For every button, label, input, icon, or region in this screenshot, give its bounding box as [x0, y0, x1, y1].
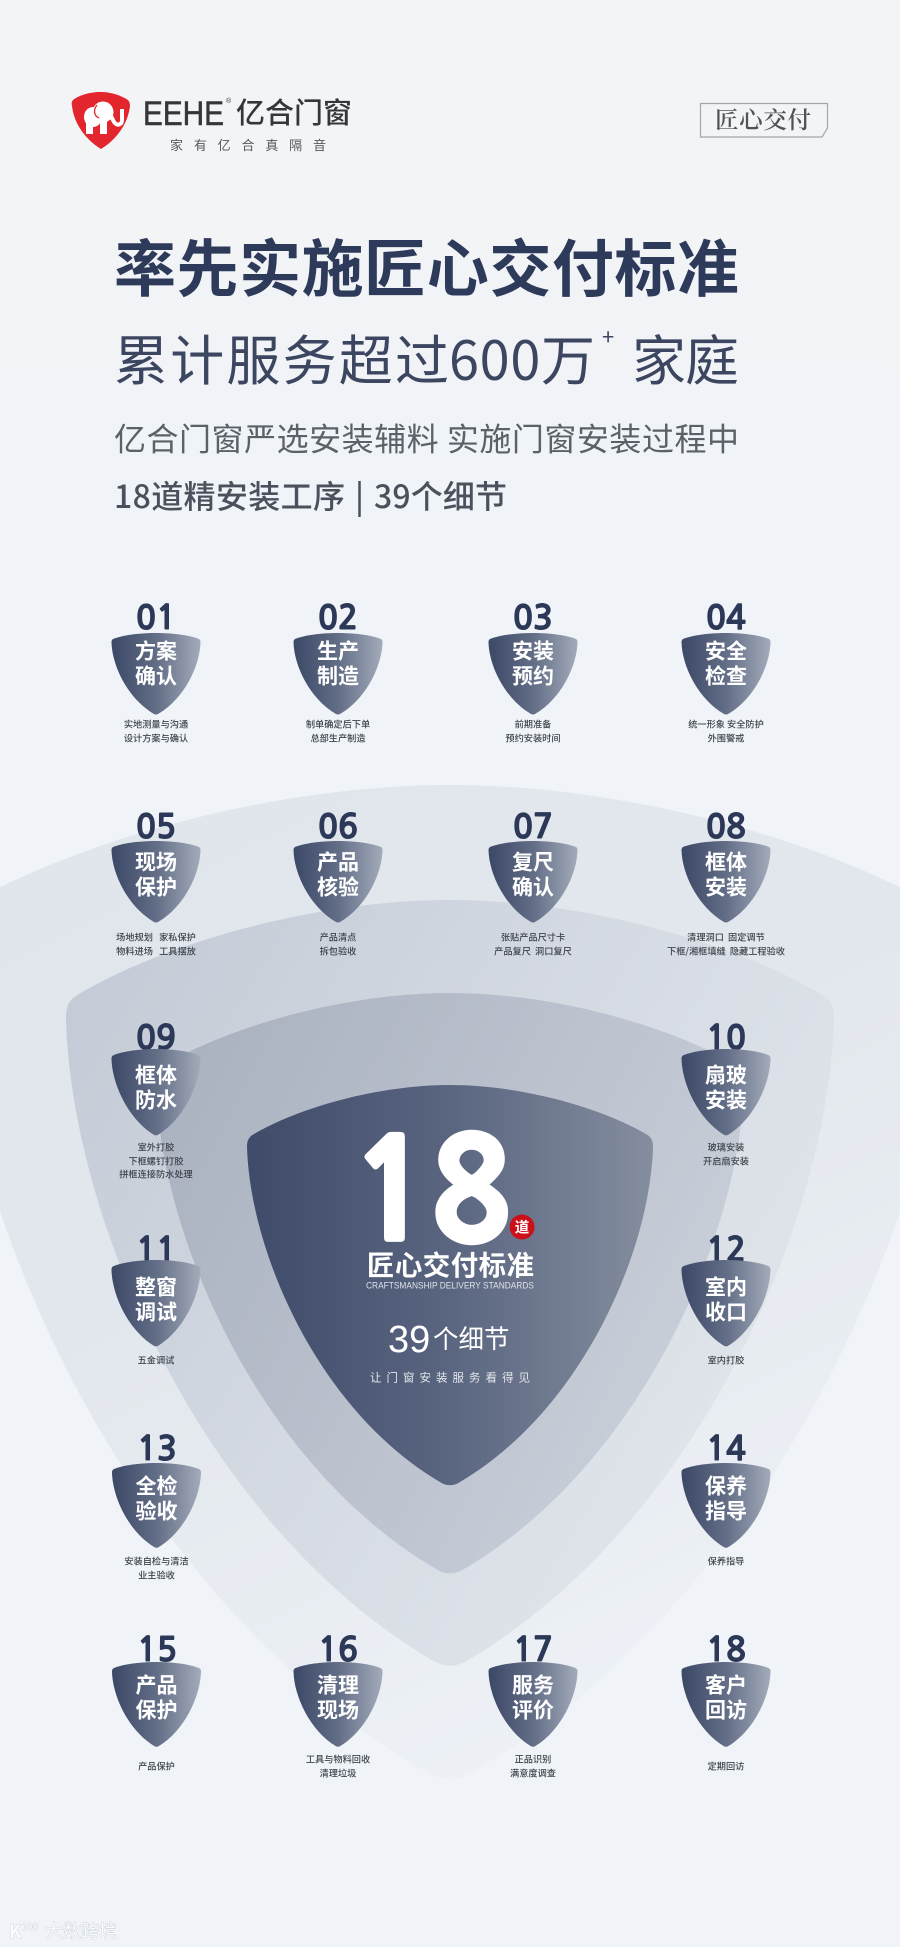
step 03: 预约安装时间	[505, 730, 561, 744]
step 06	[294, 810, 382, 958]
step 14: 保养	[705, 1470, 747, 1500]
step 11: 五金调试	[138, 1352, 174, 1366]
step 07	[488, 810, 578, 958]
step 14: 指导	[705, 1496, 747, 1526]
step 03	[488, 601, 578, 744]
step 07: 张贴产品尺寸卡	[501, 930, 565, 944]
subtitle	[114, 317, 739, 396]
step 06: 产品清点	[320, 930, 356, 944]
step 18	[682, 1633, 770, 1772]
step 02: 生产	[317, 636, 359, 666]
step 04: 统一形象 安全防护	[688, 716, 764, 730]
step 11: 整窗	[135, 1272, 177, 1302]
watermark	[9, 1918, 117, 1944]
step 04: 检查	[705, 660, 747, 690]
stats line	[114, 472, 507, 518]
subtitle: 累计服务超过	[114, 317, 449, 396]
step 04	[682, 601, 770, 744]
step 01: 方案	[135, 636, 177, 666]
step 07: 确认	[512, 872, 554, 902]
step 16: 工具与物料回收	[306, 1752, 370, 1766]
step 18: 回访	[705, 1694, 747, 1724]
step 08: 安装	[705, 872, 747, 902]
badge: 匠心交付: 匠心交付	[715, 101, 811, 135]
step 13: 全检	[136, 1470, 178, 1500]
step 02: 制造	[317, 660, 359, 690]
step 13: 安装自检与清洁	[124, 1554, 189, 1568]
step 02	[294, 601, 382, 744]
step 12	[682, 1233, 770, 1366]
step 05: 物料进场 工具摆放	[116, 944, 196, 958]
central shield: 18 standards	[247, 1085, 653, 1485]
step 10: 玻璃安装	[708, 1140, 744, 1154]
english subtitle: CRAFTSMANSHIP DELIVERY STANDARDS	[366, 1280, 534, 1292]
step 17: 17	[513, 1633, 553, 1666]
brand name: EEHE	[143, 95, 224, 133]
step 07: 产品复尺 洞口复尺	[494, 944, 572, 958]
step 18: 客户	[705, 1670, 747, 1700]
step 05: 现场	[135, 846, 177, 876]
stats line: |	[355, 472, 364, 518]
step 05: 05	[136, 810, 176, 843]
step 13: 13	[137, 1432, 177, 1465]
step 01	[112, 601, 200, 744]
step 13	[112, 1432, 201, 1582]
subtitle: +	[602, 320, 614, 352]
step 09: 09	[136, 1021, 176, 1054]
step 04: 安全	[705, 636, 747, 666]
step 16: 现场	[317, 1694, 359, 1724]
watermark: 100	[22, 1919, 38, 1933]
icon: red shield with elephant	[72, 92, 130, 149]
logo: EEHE 亿合门窗	[72, 90, 352, 154]
step 08	[667, 810, 785, 958]
step 06: 核验	[317, 872, 359, 902]
step 05	[112, 810, 200, 958]
concentric shield backdrop	[0, 785, 900, 1779]
step 08: 框体	[705, 846, 747, 876]
step 09	[112, 1021, 200, 1180]
step 15: 产品	[136, 1670, 178, 1700]
step 06: 产品	[317, 846, 359, 876]
tagline: 家有亿合真隔音	[170, 135, 326, 154]
step 03: 前期准备	[515, 716, 551, 730]
step 03: 安装	[512, 636, 554, 666]
step 17: 服务	[512, 1670, 554, 1700]
step 16: 清理垃圾	[320, 1766, 356, 1780]
subtitle: 家庭	[632, 317, 739, 396]
step 11: 调试	[135, 1296, 177, 1326]
39 details	[388, 1319, 510, 1361]
step 03: 预约	[512, 660, 554, 690]
watermark: K	[9, 1918, 22, 1944]
step 14: 保养指导	[708, 1554, 744, 1568]
badge: 道	[510, 1214, 534, 1240]
step 02: 02	[318, 601, 358, 634]
step 18: 18	[706, 1633, 746, 1666]
39 details: 个细节	[433, 1319, 510, 1356]
step 12: 12	[706, 1233, 746, 1266]
step 12: 室内打胶	[708, 1352, 744, 1366]
step 11	[112, 1233, 200, 1366]
logo: EEHE 亿合门窗: ®	[226, 97, 232, 105]
step 01: 确认	[135, 660, 177, 690]
step 18: 定期回访	[708, 1758, 744, 1772]
step 17	[488, 1633, 578, 1780]
title: 率先实施匠心交付标准	[114, 219, 739, 309]
step 05: 场地规划 家私保护	[116, 930, 196, 944]
step 16: 清理	[317, 1670, 359, 1700]
big number 18: 18	[352, 1122, 511, 1260]
step 10	[682, 1021, 770, 1168]
step 17: 正品识别	[515, 1752, 551, 1766]
step 04: 04	[706, 601, 746, 634]
step 08: 清理洞口 固定调节	[687, 930, 765, 944]
step 13: 验收	[136, 1496, 178, 1526]
step 09: 拼框连接防水处理	[119, 1166, 193, 1180]
step 08: 下框/湘框填缝 隐藏工程验收	[667, 944, 785, 958]
stats line: 18道精安装工序	[114, 472, 345, 518]
39 details: 39	[388, 1319, 430, 1361]
step 14: 14	[706, 1432, 746, 1465]
step 05: 保护	[135, 872, 177, 902]
step 10: 扇玻	[705, 1060, 747, 1090]
step 09: 下框螺钉打胶	[128, 1154, 184, 1168]
badge: 道: 道	[515, 1216, 530, 1238]
step 07: 复尺	[512, 846, 554, 876]
slogan: 让门窗安装服务看得见	[370, 1370, 530, 1386]
logo: EEHE 亿合门窗: 亿合门窗	[236, 90, 352, 132]
step 10: 安装	[705, 1084, 747, 1114]
intro line: 亿合门窗严选安装辅料 实施门窗安装过程中	[114, 414, 739, 460]
step 10: 开启扇安装	[703, 1154, 749, 1168]
step 15: 产品保护	[138, 1758, 175, 1772]
step 12: 室内	[705, 1272, 747, 1302]
step 12: 收口	[705, 1296, 747, 1326]
subtitle: 600万	[449, 317, 595, 396]
step 07: 07	[513, 810, 553, 843]
step 02: 总部生产制造	[310, 730, 366, 744]
step 15: 15	[137, 1633, 177, 1666]
heading: 匠心交付标准	[367, 1243, 534, 1283]
step 04: 外围警戒	[708, 730, 744, 744]
step 15: 保护	[136, 1694, 178, 1724]
step 15	[112, 1633, 201, 1772]
step 14	[682, 1432, 770, 1568]
step 16	[294, 1633, 382, 1780]
step 06: 06	[318, 810, 358, 843]
step 09: 框体	[135, 1060, 177, 1090]
watermark: 大数跨境	[45, 1918, 117, 1944]
step 01: 设计方案与确认	[124, 730, 188, 744]
step 13: 业主验收	[138, 1568, 175, 1582]
step 06: 拆包验收	[320, 944, 356, 958]
step 17: 评价	[512, 1694, 554, 1724]
step 09: 防水	[135, 1084, 177, 1114]
step 09: 室外打胶	[138, 1140, 174, 1154]
step 03: 03	[513, 601, 553, 634]
step 01: 实地测量与沟通	[124, 716, 188, 730]
step 11: 11	[136, 1233, 176, 1266]
step 10: 10	[706, 1021, 746, 1054]
stats line: 39个细节	[374, 472, 507, 518]
step 08: 08	[706, 810, 746, 843]
step 01: 01	[136, 601, 176, 634]
step 16: 16	[318, 1633, 358, 1666]
step 17: 满意度调查	[510, 1766, 556, 1780]
step 02: 制单确定后下单	[306, 716, 370, 730]
